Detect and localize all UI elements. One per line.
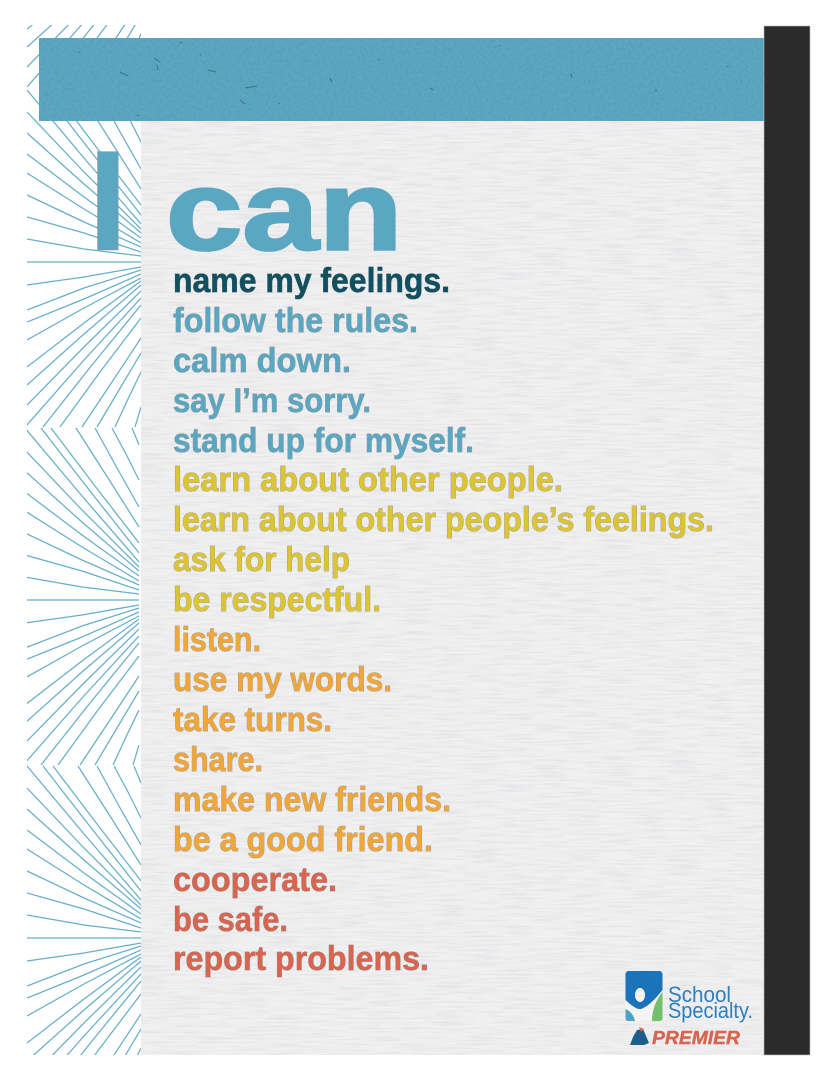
wordmark: School bbox=[668, 982, 731, 1007]
dark side bar bbox=[764, 26, 810, 1055]
list of I can statements: follow the rules. bbox=[173, 302, 418, 340]
list of I can statements: report problems. bbox=[173, 940, 429, 978]
list of I can statements: be safe. bbox=[173, 901, 288, 939]
list of I can statements: calm down. bbox=[173, 342, 351, 380]
title: I can: can bbox=[166, 147, 403, 274]
logo: School Specialty bbox=[626, 971, 753, 1023]
wordmark bbox=[668, 982, 753, 1023]
list of I can statements: make new friends. bbox=[173, 781, 451, 819]
list of I can statements: learn about other people. bbox=[173, 461, 563, 499]
panel: textured paper bbox=[141, 121, 764, 1055]
list of I can statements: ask for help bbox=[173, 541, 350, 579]
icon: figure with raised arms bbox=[626, 971, 662, 1021]
list of I can statements: cooperate. bbox=[173, 861, 337, 899]
list of I can statements: listen. bbox=[173, 621, 261, 659]
list of I can statements: name my feelings. bbox=[173, 262, 450, 300]
list of I can statements: share. bbox=[173, 741, 263, 779]
sunburst line pattern bbox=[25, 0, 141, 1080]
header band bbox=[39, 38, 764, 121]
title: I can bbox=[88, 122, 403, 281]
list of I can statements: be respectful. bbox=[173, 581, 381, 619]
list of I can statements: say I’m sorry. bbox=[173, 382, 371, 420]
list of I can statements: take turns. bbox=[173, 701, 332, 739]
title: I can: I bbox=[88, 122, 128, 281]
list of I can statements: be a good friend. bbox=[173, 821, 433, 859]
list of I can statements: use my words. bbox=[173, 661, 392, 699]
list of I can statements bbox=[173, 262, 714, 978]
logo: Premier bbox=[630, 1027, 740, 1048]
wordmark: PREMIER bbox=[652, 1028, 740, 1048]
icon: ship bbox=[630, 1027, 649, 1045]
wordmark: Specialty. bbox=[668, 998, 753, 1023]
list of I can statements: learn about other people’s feelings. bbox=[173, 501, 714, 539]
list of I can statements: stand up for myself. bbox=[173, 422, 474, 460]
